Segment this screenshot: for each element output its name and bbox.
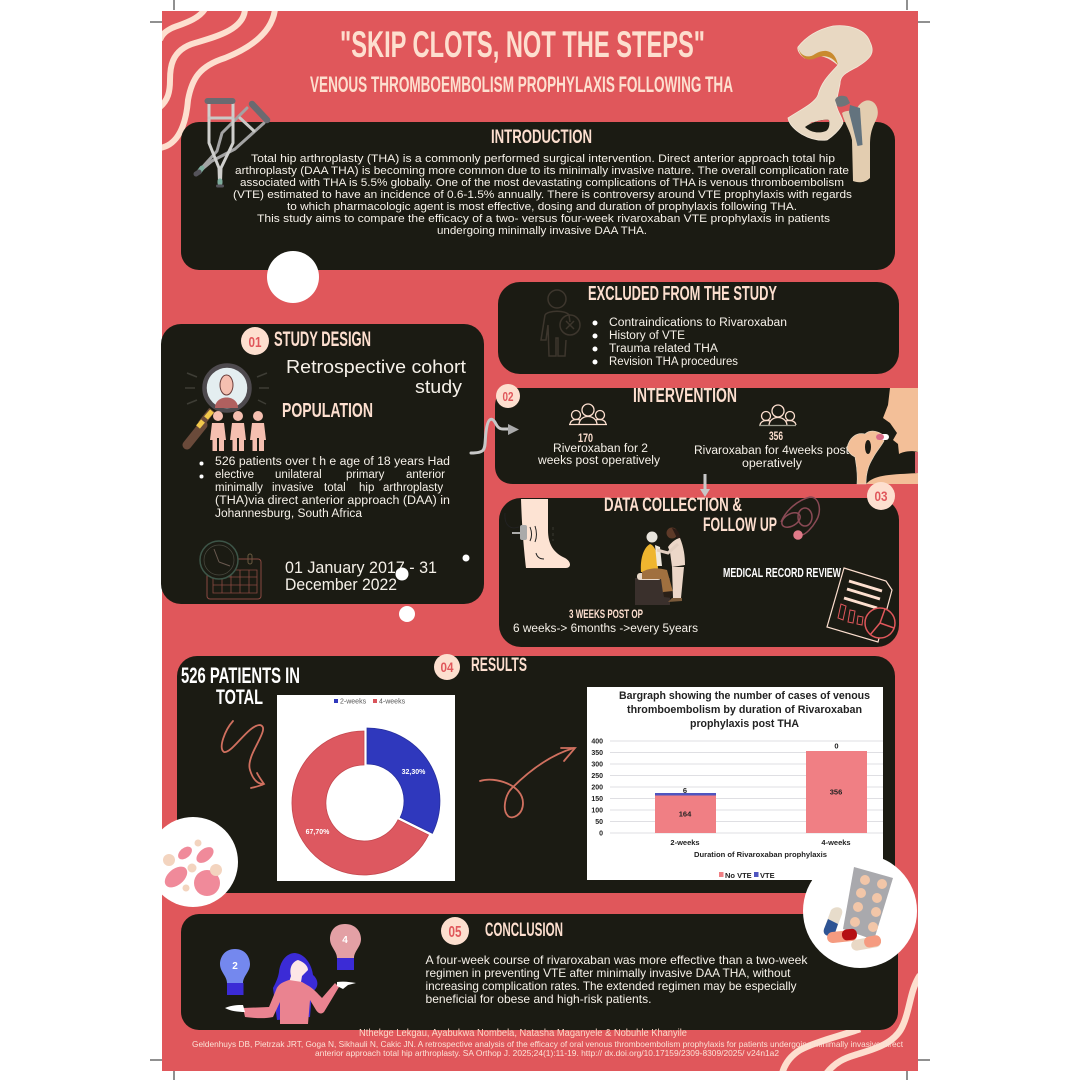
chart: donut of patients by regimen [277,695,455,881]
y axis labels: 300 [591,762,603,768]
list: population bullets: arthroplasty [383,482,443,494]
icon: magnifier and people [185,366,269,451]
value labels [306,769,426,836]
text: retrospective cohort study: Retrospective cohort [286,357,466,377]
list: population bullets: (THA)via direct anterior approach (DAA) in [215,495,450,507]
group 170 text [537,431,660,467]
legend: bars [719,871,775,880]
text: introduction body: arthroplasty (DAA THA) is becoming more common due to its minimally invasive nature. The overall complication rate [235,165,849,177]
bar: 2-weeks: 6 [683,786,687,795]
text: study dates: 01 January 2017 - 31 [285,559,437,577]
list: population bullets: Johannesburg, South Africa [215,508,363,520]
icon: woman comparing options [225,953,356,1024]
heading: excluded: EXCLUDED FROM THE STUDY [588,283,777,305]
x axis labels: 4-weeks [821,838,851,847]
text: retrospective cohort study: study [415,377,462,397]
decorative waves: top left [160,9,275,148]
text: retrospective cohort study [286,357,466,397]
list: population bullets: minimally [215,482,263,494]
bar: 2-weeks: 164 [679,810,692,818]
panel: study design [161,324,484,604]
y axis labels: 400 [591,738,603,746]
badge: 03 [867,482,895,510]
bar: 4-weeks: 356 [830,788,842,796]
subtitle: VENOUS THROMBOEMBOLISM PROPHYLAXIS FOLLOWING THA [310,72,733,97]
icon: hip implant [788,26,878,182]
legend: donut [334,698,406,706]
list: exclusions: Contraindications to Rivaroxaban [609,317,787,329]
arrow: loop to bar chart [480,748,575,817]
icon: leg with compression device [505,499,570,568]
group 356 text: Rivaroxaban for 4weeks post [694,445,850,457]
chart title [619,690,870,730]
text: conclusion body: increasing complication rates. The extended regimen may be especially [426,979,796,993]
text: conclusion body: A four-week course of rivaroxaban was more effective than a two-week [426,953,809,967]
text: conclusion body: beneficial for obese and high-risk patients. [426,992,652,1006]
heading: data collection [604,495,777,536]
slice: 4-weeks [292,731,428,875]
y axis labels: 250 [591,773,603,780]
legend: bars: No VTE [725,871,752,880]
bar: 2-weeks [655,786,716,833]
y axis labels: 50 [595,819,603,826]
text: introduction body: Total hip arthroplasty (THA) is a commonly performed surgical intervention. Direct anterior approach total hip [251,153,835,165]
bar: 4-weeks [806,742,867,833]
icon: pink bulb labelled 4: 4 [342,935,348,946]
badge: 04 [434,654,460,680]
text: introduction body: undergoing minimally invasive DAA THA. [437,225,647,237]
list: population bullets: elective [215,469,254,481]
icon: excluded person [541,290,580,356]
text: 526 patients in total: TOTAL [216,686,263,709]
group 170 text: weeks post operatively [537,455,660,467]
badge: 01: 01 [248,334,262,351]
list: population bullets: hip [359,482,374,494]
chart title: thromboembolism by duration of Rivaroxaban [627,704,862,716]
list: population bullets: primary [346,469,385,481]
poster background [162,11,918,1071]
list: exclusions [592,317,787,368]
legend: bars: VTE [760,871,775,880]
list: population bullets: 526 patients over t h e age of 18 years Had [215,456,450,468]
group 356 text: 356 [769,429,783,443]
label: medical record review: MEDICAL RECORD REVIEW [723,565,841,580]
icon: medical record [827,568,895,642]
value labels: 67,70% [306,829,330,836]
text: citation: Geldenhuys DB, Pietrzak JRT, Goga N, Sikhauli N, Cakic JN. A retrospective analysis of the efficacy of oral venous thromboembolism prophylaxis for patients undergoing minimally invasive direct [192,1039,904,1049]
text: follow up schedule: 6 weeks-> 6months ->every 5years [513,623,698,635]
group 170 text: 170 [578,431,593,445]
list: population bullets [200,456,450,520]
x axis labels: 2-weeks [670,838,700,847]
group 356 text [694,429,850,470]
heading: introduction: INTRODUCTION [491,127,592,148]
y axis labels [591,738,603,838]
text: citation [192,1039,904,1058]
icon: face and hand taking pill [847,388,918,484]
white dots [396,554,470,622]
list: exclusions: Revision THA procedures [609,356,738,368]
icon: pills circle [803,854,917,968]
text: introduction body: associated with THA is 5.5% globally. One of the most devastating complications of THA is venous thromboembolism [240,177,844,189]
text: introduction body: to which pharmacologic agent is most effective, dosing and duration of prophylaxis following THA. [287,201,797,213]
text: introduction body [233,153,853,237]
title: "SKIP CLOTS, NOT THE STEPS" [340,24,705,65]
badge: 03: 03 [874,488,888,504]
x axis labels [670,838,851,859]
value labels: 32,30% [402,769,426,776]
arrow: study design to intervention [471,419,519,453]
heading: results: RESULTS [471,655,527,676]
text: follow up schedule [513,607,698,635]
text: study dates [285,559,437,594]
panel: introduction [181,122,895,270]
chart title: prophylaxis post THA [690,718,799,730]
text: 526 patients in total [181,663,300,709]
heading: data collection: FOLLOW UP [703,515,777,536]
text: follow up schedule: 3 WEEKS POST OP [569,607,643,621]
slice: 2-weeks [367,728,440,833]
heading: intervention: INTERVENTION [633,385,737,407]
text: authors: Nthekge Lekgau, Ayabukwa Nombela, Natasha Maganyele & Nobuhle Khanyile [359,1028,687,1039]
chart: stacked bar of VTE cases [587,687,883,880]
text: conclusion body [426,953,809,1006]
icon: stethoscope [779,497,819,539]
text: introduction body: This study aims to compare the efficacy of a two- versus four-week rivaroxaban VTE prophylaxis in patients [257,213,831,225]
panel: data collection and follow up [499,495,899,647]
legend: donut: 2-weeks [340,698,367,706]
x axis labels: Duration of Rivaroxaban prophylaxis [694,850,827,859]
heading: population: POPULATION [282,400,373,422]
heading: study design: STUDY DESIGN [274,328,371,351]
icon: blue bulb labelled 2: 2 [232,961,238,972]
icon: crutches [196,101,267,186]
badge: 05 [441,917,469,945]
y axis labels: 100 [591,808,603,814]
white dot [267,251,319,303]
list: population bullets: invasive [272,482,314,494]
heading: conclusion: CONCLUSION [485,920,563,941]
list: population bullets: unilateral [275,469,322,481]
badge: 01 [241,327,269,355]
badge: 04: 04 [440,659,454,675]
group 356 text: operatively [742,458,802,470]
icon: clock and calendar [200,541,261,599]
panel: intervention [495,384,918,484]
icon: doctor and patient [635,528,685,605]
panel: excluded from the study [498,282,899,374]
icon: group 170 [569,404,607,424]
y axis labels: 0 [599,830,603,838]
text: introduction body: (VTE) estimated to have an incidence of 0.6-1.5% annually. There is controversy around VTE prophylaxis with regards [233,189,853,201]
list: exclusions: History of VTE [609,330,685,342]
list: population bullets: total [324,482,346,494]
badge: 02 [496,384,520,408]
panel: results [177,654,895,893]
text: conclusion body: regimen in preventing VTE after minimally invasive DAA THA, without [426,966,791,980]
panel: conclusion [181,914,898,1030]
list: population bullets: anterior [406,469,445,481]
text: citation: anterior approach total hip arthroplasty. SA Orthop J. 2025;24(1):11-19. http:// dx.doi.org/10.17159/2309-8309/2025/ v24n1a2 [315,1048,779,1058]
badge: 05: 05 [448,924,462,941]
heading: data collection: DATA COLLECTION & [604,495,742,516]
list: exclusions: Trauma related THA [609,343,718,355]
arrow: intervention to data collection [700,474,710,497]
legend: donut: 4-weeks [379,698,406,706]
text: 526 patients in total: 526 PATIENTS IN [181,663,300,688]
badge: 02: 02 [502,389,514,404]
decorative waves: bottom right [782,975,920,1074]
arrow: squiggle to donut [222,721,264,788]
icon: blue bulb labelled 2 [220,949,250,995]
text: study dates: December 2022 [285,576,397,594]
y axis labels: 350 [591,750,603,757]
group 170 text: Riveroxaban for 2 [553,443,648,455]
y axis labels: 150 [591,796,603,803]
chart title: Bargraph showing the number of cases of venous [619,690,870,702]
icon: blood cells circle [162,817,238,907]
y axis labels: 200 [591,784,603,792]
icon: group 356 [759,405,796,426]
icon: pink bulb labelled 4 [330,924,361,970]
bar: 4-weeks: 0 [834,742,839,750]
